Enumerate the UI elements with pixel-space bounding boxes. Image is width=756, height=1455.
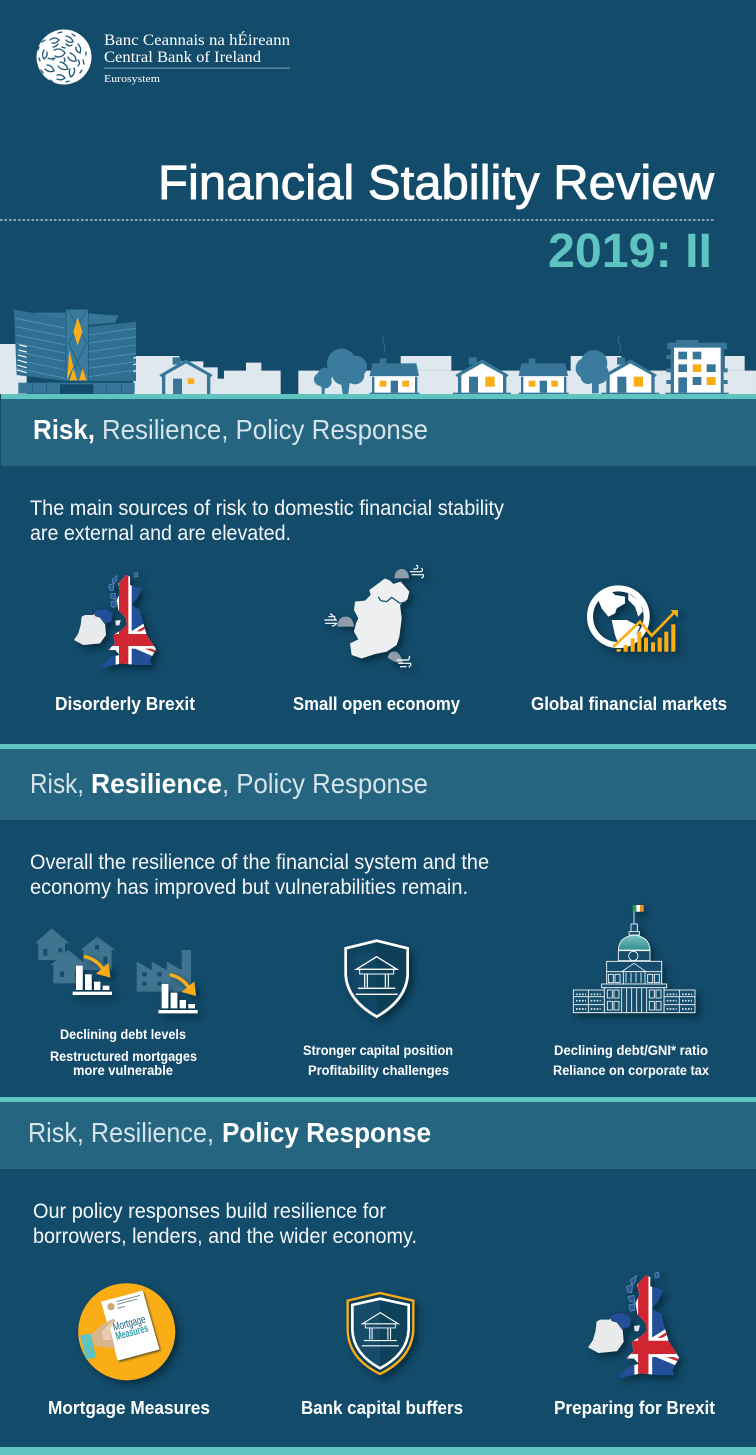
icon: UK and Ireland map with union flag: [74, 570, 160, 670]
label: debt ratio: Reliance on corporate tax: [553, 1063, 709, 1078]
icon: government buildings with Irish flag: [573, 905, 695, 1013]
bank name: Central Bank of Ireland: [104, 49, 261, 66]
icon: globe with rising chart: [590, 588, 678, 652]
text: risk summary: are external and are elevated.: [30, 522, 291, 545]
text: resilience summary: economy has improved but vulnerabilities remain.: [30, 876, 468, 899]
icon: Ireland map with storm clouds: [324, 565, 423, 667]
trees: [314, 349, 367, 394]
label: debt levels: [50, 1027, 197, 1078]
label: debt levels: more vulnerable: [73, 1063, 173, 1078]
label: debt ratio: [553, 1043, 709, 1078]
heading: Resilience: [0, 749, 756, 820]
tree 2: [576, 350, 609, 393]
text: risk summary: The main sources of risk to domestic financial stability: [30, 497, 504, 520]
flat house 2: [519, 358, 569, 394]
heading: Policy Response: Risk, Resilience,: [28, 1117, 214, 1148]
title: Financial Stability Review: [158, 157, 714, 210]
panel: Policy Response: [0, 1097, 756, 1418]
text: resilience summary: [30, 851, 489, 899]
heading: Risk: Resilience, Policy Response: [102, 414, 428, 445]
skyline illustration: [0, 309, 756, 394]
Titanic-style landmark building: [14, 309, 136, 394]
heading: Risk: [1, 399, 756, 466]
bank name: Eurosystem: [104, 74, 160, 85]
label: capital: [303, 1043, 453, 1078]
heading: Resilience: , Policy Response: [222, 768, 428, 799]
icon: Mortgage Measures booklet: Mortgage: [112, 1314, 147, 1334]
icon: shield with bank: [346, 941, 408, 1017]
label: capital: Profitability challenges: [308, 1063, 449, 1078]
smoke wisps: [383, 335, 621, 353]
house row: [159, 335, 729, 394]
text: policy summary: [33, 1200, 417, 1248]
icon: bank seal: [36, 30, 92, 84]
heading: Policy Response: Policy Response: [222, 1117, 431, 1148]
label: debt levels: Declining debt levels: [60, 1027, 186, 1042]
footer bar: [0, 1447, 756, 1455]
icon: Mortgage Measures booklet: [78, 1283, 175, 1380]
text: risk summary: [30, 497, 504, 545]
label: debt levels: Restructured mortgages: [50, 1049, 197, 1064]
heading: Risk: Risk,: [33, 414, 95, 445]
apartment block: [665, 340, 729, 394]
panel: Resilience: [0, 744, 756, 1078]
label: Mortgage Measures: Mortgage Measures: [48, 1398, 210, 1418]
title: [0, 157, 714, 278]
icon: shield with bank, gold outline: [348, 1293, 413, 1374]
heading: Policy Response: [0, 1102, 756, 1169]
gable house 2: [453, 357, 511, 394]
label: Global financial markets: Global financial markets: [531, 694, 727, 714]
bank name: Banc Ceannais na hÉireann: [104, 30, 290, 49]
heading: Resilience: Risk,: [30, 768, 84, 799]
label: Small open economy: Small open economy: [293, 694, 460, 714]
text: policy summary: Our policy responses build resilience for: [33, 1200, 386, 1223]
bank name: [104, 30, 290, 85]
label: Bank capital buffers: Bank capital buffers: [301, 1398, 463, 1418]
icon: Mortgage Measures booklet: Measures: [114, 1323, 150, 1343]
flat house 1: [370, 358, 420, 394]
logo: Central Bank of Ireland: [36, 30, 290, 85]
label: capital: Stronger capital position: [303, 1043, 453, 1058]
label: Disorderly Brexit: Disorderly Brexit: [55, 694, 195, 714]
panel: Risk: [1, 394, 756, 714]
gable house 3: [601, 357, 659, 394]
heading: Resilience: Resilience: [91, 768, 222, 799]
label: Preparing for Brexit: Preparing for Brexit: [554, 1398, 715, 1418]
label: debt ratio: Declining debt/GNI* ratio: [554, 1043, 708, 1058]
title: 2019: II: [548, 225, 712, 278]
gable house left: [159, 357, 213, 394]
pale background buildings: [0, 344, 756, 394]
text: resilience summary: Overall the resilience of the financial system and the: [30, 851, 489, 874]
icon: UK and Ireland map, preparing for Brexit: [588, 1270, 684, 1381]
icon: houses and factory with falling debt bars: [35, 928, 198, 1013]
text: policy summary: borrowers, lenders, and the wider economy.: [33, 1225, 417, 1248]
